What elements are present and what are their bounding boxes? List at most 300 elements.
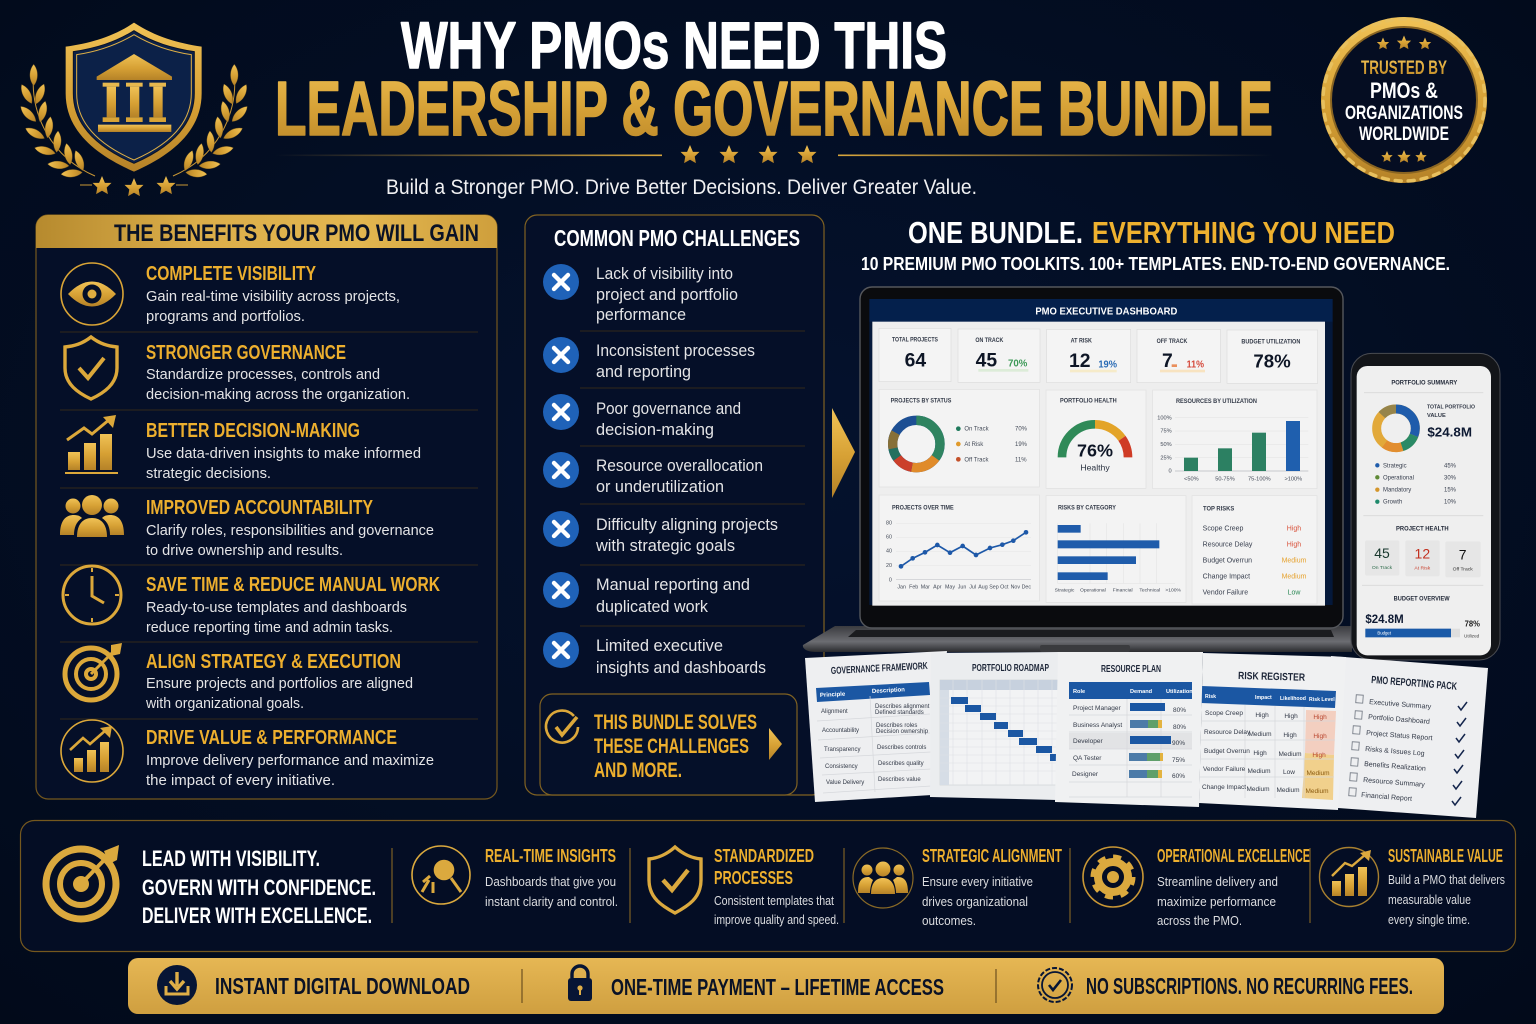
pillar: sustainable value: measurable value: [1388, 892, 1471, 907]
document: risk register: RISK REGISTER: [1238, 670, 1306, 684]
title: [275, 8, 1273, 199]
phone: portfolio summary: 30%: [1444, 476, 1457, 482]
document: pmo reporting pack: PMO REPORTING PACK: [1371, 674, 1458, 693]
heading: challenges: COMMON PMO CHALLENGES: [554, 225, 800, 251]
icon: right laurel: [173, 64, 250, 178]
list: top risks: TOP RISKS: [1203, 506, 1234, 512]
phone: portfolio summary: Mandatory: [1383, 488, 1411, 494]
benefit: improved accountability: Clarify roles, responsibilities and governance: [146, 522, 434, 539]
phone: portfolio summary: [1364, 380, 1483, 506]
document: risk register: Medium: [1278, 751, 1302, 758]
phone: portfolio summary: Operational: [1383, 476, 1414, 482]
document: governance framework: Describes value: [878, 777, 921, 783]
icon: download: [157, 965, 197, 1005]
pillar: sustainable value: [1320, 846, 1505, 927]
chart: projects over time: 20: [886, 563, 892, 569]
benefit: improved accountability: to drive ownership and results.: [146, 542, 343, 559]
icon: clock: [63, 566, 121, 624]
chart: projects over time: May: [945, 584, 955, 590]
document: risk register: Impact: [1255, 695, 1272, 701]
document: risk register: High: [1255, 712, 1269, 719]
KPI: total projects: TOTAL PROJECTS: [892, 338, 938, 344]
callout: bundle solves: THIS BUNDLE SOLVES: [594, 711, 757, 734]
benefit: stronger governance: [65, 337, 410, 403]
list: top risks: High: [1287, 525, 1301, 532]
phone: project health: PROJECT HEALTH: [1396, 525, 1449, 532]
phone: budget overview: [1362, 585, 1483, 638]
benefit: align strategy: ALIGN STRATEGY & EXECUTION: [146, 651, 401, 673]
document: pmo reporting pack: Benefits Realization: [1364, 761, 1426, 773]
chart: projects over time: Jul: [969, 584, 976, 590]
document: pmo reporting pack: Financial Report: [1361, 792, 1412, 803]
document: resource plan: 90%: [1172, 740, 1185, 747]
KPI: on track: [958, 329, 1040, 382]
document: pmo reporting pack: Risks & Issues Log: [1365, 746, 1425, 758]
pillar: real-time insights: [412, 846, 618, 909]
trust badge: ORGANIZATIONS: [1345, 103, 1463, 124]
chart: projects over time: Mar: [921, 584, 930, 590]
chart: resources by utilization: RESOURCES BY UTILIZATION: [1176, 399, 1257, 405]
pillar: operational excellence: maximize performance: [1157, 894, 1276, 909]
chart: projects by status: 70%: [1015, 427, 1028, 433]
document: governance framework: GOVERNANCE FRAMEWORK: [831, 661, 929, 677]
challenge 6: [543, 572, 750, 616]
icon: shield check: [65, 337, 117, 399]
chart: resources by utilization: 50-75%: [1215, 477, 1235, 483]
document: resource plan: Role: [1073, 689, 1085, 695]
laptop: [803, 287, 1352, 652]
pillar: real-time insights: Dashboards that give you: [485, 874, 616, 889]
benefit: align strategy: Ensure projects and portfolios are aligned: [146, 675, 413, 692]
emblem: shield with laurel: [18, 23, 250, 196]
icon: eye: [61, 263, 123, 325]
document: pmo reporting pack: Executive Summary: [1369, 699, 1432, 711]
document: governance framework: Describes alignment: [875, 704, 930, 710]
document: governance framework: Transparency: [824, 747, 860, 753]
chart: projects over time: 40: [886, 549, 892, 555]
document: resource plan: Designer: [1072, 771, 1099, 778]
KPI: at risk: [1047, 329, 1131, 383]
phone: project health: [1363, 516, 1483, 577]
chart: resources by utilization: 75%: [1160, 429, 1172, 435]
benefit: better decision-making: strategic decisions.: [146, 465, 271, 482]
tagline: Build a Stronger PMO. Drive Better Decisions. Deliver Greater Value.: [386, 176, 977, 199]
document: governance framework: Decision ownership: [876, 729, 929, 735]
panel heading band: [36, 215, 497, 248]
chart: risks by category: RISKS BY CATEGORY: [1058, 506, 1116, 512]
list: top risks: Low: [1288, 590, 1301, 597]
benefit: save time: SAVE TIME & REDUCE MANUAL WORK: [146, 574, 440, 596]
chart: resources by utilization: <50%: [1184, 477, 1199, 483]
document: risk register: Risk: [1205, 694, 1216, 700]
phone: project health: At Risk: [1414, 566, 1431, 572]
slogan: LEAD WITH VISIBILITY.: [142, 846, 320, 871]
heading: benefits: THE BENEFITS YOUR PMO WILL GAIN: [114, 220, 479, 247]
document: governance framework: Alignment: [821, 709, 848, 715]
document: pmo reporting pack: Project Status Report: [1366, 730, 1433, 742]
icon: target: [65, 643, 122, 700]
chart: projects over time: Feb: [909, 584, 918, 590]
benefit: drive value: the impact of every initiative.: [146, 772, 335, 789]
pillar: strategic alignment: drives organizational: [922, 894, 1028, 909]
icon: lock: [568, 966, 592, 1001]
chart: projects over time: Apr: [933, 584, 942, 590]
challenge 4: Resource overallocation: [596, 456, 763, 475]
chart: projects over time: 80: [886, 521, 892, 527]
dashboard title: PMO EXECUTIVE DASHBOARD: [1035, 306, 1177, 317]
document: risk register: Risk Level: [1309, 697, 1335, 703]
benefit: drive value: [61, 720, 434, 789]
icon: seal check: [1038, 968, 1072, 1002]
pillar: standardized processes: [649, 846, 839, 927]
pillar: standardized processes: Consistent templates that: [714, 893, 834, 908]
chart: portfolio health gauge: [1046, 390, 1146, 488]
list: top risks: Resource Delay: [1203, 541, 1253, 548]
icon: value chart: [61, 720, 123, 782]
chart: projects over time: [879, 495, 1039, 601]
pillar: operational excellence: across the PMO.: [1157, 913, 1242, 928]
list: top risks: [1192, 496, 1317, 604]
pillar: strategic alignment: STRATEGIC ALIGNMENT: [922, 846, 1062, 866]
document: risk register: Medium: [1305, 788, 1329, 795]
benefit: drive value: Improve delivery performance and maximize: [146, 752, 434, 769]
chart: projects over time: Jun: [958, 584, 966, 590]
document: risk register: Likelihood: [1280, 696, 1306, 702]
benefit: improved accountability: [60, 495, 434, 559]
KPI: off track: [1137, 329, 1220, 383]
list: top risks: Medium: [1282, 557, 1307, 564]
phone: portfolio summary: TOTAL PORTFOLIO: [1427, 405, 1476, 411]
KPI: at risk: 12: [1069, 351, 1090, 372]
banner: purchase terms: ONE-TIME PAYMENT – LIFETIME ACCESS: [611, 974, 944, 1000]
KPI: on track: ON TRACK: [975, 338, 1004, 344]
document: risk register: Medium: [1248, 731, 1272, 738]
document: portfolio roadmap: PORTFOLIO ROADMAP: [972, 663, 1049, 674]
challenge 6: duplicated work: [596, 597, 708, 616]
chart: projects over time: 60: [886, 535, 892, 541]
chart: projects over time: Jan: [897, 584, 906, 590]
callout: bundle solves: THESE CHALLENGES: [594, 735, 749, 758]
chart: resources by utilization: 0: [1169, 469, 1172, 475]
challenge 1: project and portfolio: [596, 285, 738, 304]
benefit: better decision-making: Use data-driven insights to make informed: [146, 445, 421, 462]
laptop base: [803, 626, 1352, 652]
document: resource plan: Demand: [1130, 689, 1153, 695]
benefit: drive value: DRIVE VALUE & PERFORMANCE: [146, 727, 397, 749]
document: resource plan: Developer: [1073, 738, 1103, 745]
benefit: improved accountability: IMPROVED ACCOUNTABILITY: [146, 497, 374, 519]
chart: projects by status: PROJECTS BY STATUS: [891, 398, 951, 404]
challenge 5: [543, 511, 778, 555]
document: risk register: Vendor Failure: [1203, 766, 1246, 773]
phone: project health: Off Track: [1453, 567, 1473, 573]
document: pmo reporting pack: [1331, 656, 1488, 818]
benefit: stronger governance: decision-making across the organization.: [146, 386, 410, 403]
phone: project health: 7: [1459, 547, 1467, 563]
chart: risks by category: Strategic: [1055, 588, 1075, 594]
KPI: total projects: 64: [905, 350, 926, 371]
document: risk register: High: [1313, 714, 1327, 721]
trust badge: WORLDWIDE: [1359, 124, 1449, 145]
phone: budget overview: 78%: [1465, 620, 1480, 629]
subheading: 10 PREMIUM PMO TOOLKITS. 100+ TEMPLATES. END-TO-END GOVERNANCE.: [861, 254, 1450, 274]
icon: shield check: [649, 847, 701, 913]
chart: resources by utilization: 100%: [1157, 415, 1172, 421]
benefit: better decision-making: [65, 415, 421, 482]
challenge 7: Limited executive: [596, 636, 723, 655]
benefit: stronger governance: Standardize processes, controls and: [146, 366, 380, 383]
chart: portfolio health gauge: PORTFOLIO HEALTH: [1060, 399, 1117, 405]
callout: bundle solves: [540, 694, 797, 795]
KPI: on track: 45: [976, 350, 997, 371]
document: risk register: [1199, 653, 1346, 810]
benefit: better decision-making: BETTER DECISION-MAKING: [146, 420, 360, 442]
challenge 2: [543, 337, 755, 381]
pillar: strategic alignment: Ensure every initiative: [922, 874, 1033, 889]
document: pmo reporting pack: Portfolio Dashboard: [1368, 714, 1430, 726]
chart: resources by utilization: 50%: [1160, 442, 1172, 448]
challenge 5: Difficulty aligning projects: [596, 515, 778, 534]
document: governance framework: Description: [872, 687, 905, 695]
document: governance framework: [805, 651, 947, 802]
phone: budget overview: $24.8M: [1365, 612, 1404, 626]
icon: big target: [46, 845, 119, 919]
pillar: operational excellence: OPERATIONAL EXCELLENCE: [1157, 846, 1310, 866]
document: risk register: Medium: [1247, 768, 1271, 775]
benefit: align strategy: with organizational goals.: [145, 695, 304, 712]
icon: gear: [1083, 847, 1143, 907]
phone: portfolio summary: 10%: [1444, 500, 1457, 506]
list: top risks: Scope Creep: [1203, 525, 1244, 532]
list: top risks: Vendor Failure: [1203, 590, 1248, 597]
phone: portfolio summary: 15%: [1444, 488, 1457, 494]
document: risk register: Low: [1283, 769, 1295, 776]
chart: portfolio health gauge: 76%: [1077, 441, 1113, 461]
KPI: total projects: [879, 328, 951, 382]
challenge 7: insights and dashboards: [596, 658, 766, 677]
challenge 4: [543, 452, 763, 496]
document: resource plan: 80%: [1173, 707, 1186, 714]
chart: portfolio health gauge: Healthy: [1080, 463, 1110, 473]
heading: one bundle: ONE BUNDLE.: [908, 215, 1083, 250]
chart: projects by status: [879, 389, 1039, 487]
panel: bottom pillars: [20, 820, 1516, 952]
document: resource plan: 75%: [1172, 757, 1185, 764]
document: portfolio roadmap: [930, 652, 1059, 800]
icon: magnifier: [412, 846, 470, 904]
document: governance framework: Defined standards: [875, 710, 924, 716]
document: resource plan: 60%: [1172, 773, 1185, 780]
chart: resources by utilization: 75-100%: [1248, 477, 1271, 483]
chart: risks by category: >100%: [1165, 588, 1182, 594]
chart: projects over time: PROJECTS OVER TIME: [892, 505, 954, 511]
document: resource plan: 80%: [1173, 724, 1186, 731]
benefit: complete visibility: Gain real-time visibility across projects,: [146, 288, 400, 305]
document: risk register: High: [1313, 733, 1327, 740]
chart: projects over time: Aug: [978, 584, 988, 590]
challenge 4: or underutilization: [596, 477, 724, 496]
icon: left laurel: [18, 64, 95, 178]
trust badge: TRUSTED BY: [1361, 58, 1447, 79]
KPI: on track: 70%: [1008, 359, 1027, 370]
document: pmo reporting pack: Resource Summary: [1363, 777, 1426, 789]
slogan: DELIVER WITH EXCELLENCE.: [142, 903, 372, 928]
benefit: save time: reduce reporting time and admin tasks.: [146, 619, 393, 636]
phone: budget overview: Utilized: [1464, 633, 1480, 638]
pillar: real-time insights: instant clarity and control.: [485, 894, 618, 909]
document: risk register: Change Impact: [1202, 784, 1246, 791]
list: top risks: Change Impact: [1203, 574, 1250, 581]
chart: risks by category: Operational: [1080, 588, 1106, 594]
document: resource plan: Project Manager: [1073, 705, 1122, 712]
phone: [1351, 353, 1500, 660]
benefit: complete visibility: COMPLETE VISIBILITY: [146, 263, 317, 285]
KPI: at risk: 19%: [1098, 359, 1117, 370]
chart: projects by status: At Risk: [964, 442, 983, 448]
phone: portfolio summary: Strategic: [1383, 464, 1407, 470]
document: governance framework: Accountability: [822, 728, 859, 734]
KPI: budget utilization: [1227, 330, 1318, 383]
callout: bundle solves: AND MORE.: [594, 759, 682, 782]
dashboard screen: [872, 322, 1325, 606]
document: risk register: Medium: [1306, 770, 1330, 777]
phone: portfolio summary: 45%: [1444, 464, 1457, 470]
phone: project health: On Track: [1372, 565, 1393, 571]
pillar: standardized processes: improve quality and speed.: [714, 912, 839, 927]
icon: three stars: [80, 176, 188, 196]
pillar: operational excellence: [1083, 846, 1310, 928]
chart: risks by category: [1046, 496, 1186, 602]
benefit: align strategy: [65, 643, 413, 712]
list: top risks: Medium: [1282, 574, 1307, 581]
benefit: save time: Ready-to-use templates and dashboards: [146, 599, 407, 616]
challenge 1: [543, 264, 738, 324]
document: governance framework: Describes quality: [878, 761, 924, 767]
trust badge: PMOs &: [1370, 78, 1438, 103]
list: top risks: Budget Overrun: [1203, 557, 1252, 564]
document: risk register: High: [1283, 732, 1297, 739]
document: risk register: Budget Overrun: [1204, 748, 1250, 755]
heading: one bundle: [861, 215, 1450, 274]
KPI: off track: OFF TRACK: [1157, 339, 1188, 345]
document: resource plan: RESOURCE PLAN: [1101, 663, 1161, 675]
KPI: budget utilization: 78%: [1253, 351, 1291, 372]
phone: portfolio summary: VALUE: [1427, 413, 1446, 419]
phone: project health: 45: [1374, 545, 1390, 561]
phone: budget overview: BUDGET OVERVIEW: [1394, 596, 1450, 603]
slogan: [142, 846, 376, 928]
benefit: complete visibility: [61, 263, 400, 325]
KPI: off track: 11%: [1187, 359, 1204, 370]
icon: growth chart: [65, 415, 118, 473]
document: risk register: High: [1253, 750, 1267, 757]
challenge 1: Lack of visibility into: [596, 264, 733, 283]
chart: resources by utilization: >100%: [1284, 477, 1302, 483]
pillar: standardized processes: STANDARDIZED: [714, 846, 814, 866]
chart: risks by category: Technical: [1139, 588, 1160, 594]
pillar: strategic alignment: outcomes.: [922, 913, 976, 928]
challenge 1: performance: [596, 305, 686, 324]
KPI: at risk: AT RISK: [1071, 338, 1093, 344]
chart: resources by utilization: 25%: [1160, 455, 1172, 461]
document: resource plan: Business Analyst: [1073, 722, 1122, 729]
document: risk register: Medium: [1276, 787, 1300, 794]
icon: shield: [66, 23, 202, 172]
chart: resources by utilization: [1153, 390, 1317, 489]
challenge 3: Poor governance and: [596, 399, 741, 418]
icon: callout arrow: [769, 728, 782, 760]
phone: portfolio summary: Growth: [1383, 500, 1402, 506]
document: governance framework: Principle: [820, 692, 846, 699]
KPI: budget utilization: BUDGET UTILIZATION: [1241, 339, 1300, 345]
phone: portfolio summary: PORTFOLIO SUMMARY: [1391, 380, 1458, 387]
document: governance framework: Value Delivery: [826, 780, 864, 786]
chart: projects by status: Off Track: [964, 457, 989, 463]
trust badge: [1321, 17, 1487, 183]
KPI: off track: 7: [1162, 351, 1173, 372]
challenge 5: with strategic goals: [595, 536, 735, 555]
pillar: real-time insights: REAL-TIME INSIGHTS: [485, 846, 616, 866]
arrow: to bundle: [832, 408, 855, 498]
banner: purchase terms: [128, 958, 1444, 1014]
document: resource plan: QA Tester: [1073, 755, 1102, 762]
document: governance framework: Consistency: [825, 764, 858, 770]
phone: budget overview: Budget: [1377, 630, 1392, 635]
list: top risks: High: [1287, 541, 1301, 548]
document: resource plan: [1055, 652, 1203, 807]
slogan: GOVERN WITH CONFIDENCE.: [142, 875, 376, 900]
challenge 6: Manual reporting and: [596, 575, 750, 594]
challenge 7: [543, 632, 766, 677]
phone: project health: 12: [1415, 546, 1430, 562]
document: risk register: High: [1312, 752, 1326, 759]
chart: projects by status: 19%: [1015, 442, 1028, 448]
pillar: operational excellence: Streamline delivery and: [1157, 874, 1278, 889]
benefit: complete visibility: programs and portfolios.: [146, 308, 305, 325]
document: governance framework: Describes roles: [876, 723, 917, 729]
panel: benefits: [36, 215, 497, 799]
chart: projects over time: Oct: [1000, 584, 1009, 590]
icon: people: [60, 495, 124, 537]
heading: one bundle: EVERYTHING YOU NEED: [1092, 215, 1395, 250]
benefit: stronger governance: STRONGER GOVERNANCE: [146, 342, 346, 364]
icon: people: [853, 848, 913, 908]
challenge 3: [543, 394, 741, 439]
chart: projects over time: Sep: [989, 584, 999, 590]
document: risk register: High: [1284, 713, 1298, 720]
pillar: sustainable value: Build a PMO that delivers: [1388, 872, 1505, 887]
document: resource plan: Utilization: [1166, 689, 1193, 695]
benefit: save time: [63, 566, 440, 636]
document: risk register: Medium: [1246, 786, 1270, 793]
challenge 2: Inconsistent processes: [596, 341, 755, 360]
divider with stars: [275, 145, 1273, 163]
banner: purchase terms: INSTANT DIGITAL DOWNLOAD: [215, 973, 470, 999]
pillar: standardized processes: PROCESSES: [714, 868, 793, 888]
document: risk register: Scope Creep: [1205, 710, 1243, 717]
challenge 2: and reporting: [596, 362, 691, 381]
chart: projects over time: Dec: [1022, 584, 1031, 590]
icon: check circle: [546, 711, 578, 743]
document: governance framework: Describes controls: [877, 745, 926, 751]
chart: projects by status: 11%: [1015, 457, 1027, 463]
chart: projects over time: 0: [889, 577, 892, 583]
document: risk register: Resource Delay: [1204, 729, 1251, 736]
challenge 3: decision-making: [596, 420, 714, 439]
panel: challenges: [525, 215, 824, 795]
phone: portfolio summary: $24.8M: [1427, 424, 1472, 439]
pillar: sustainable value: every single time.: [1388, 912, 1470, 927]
